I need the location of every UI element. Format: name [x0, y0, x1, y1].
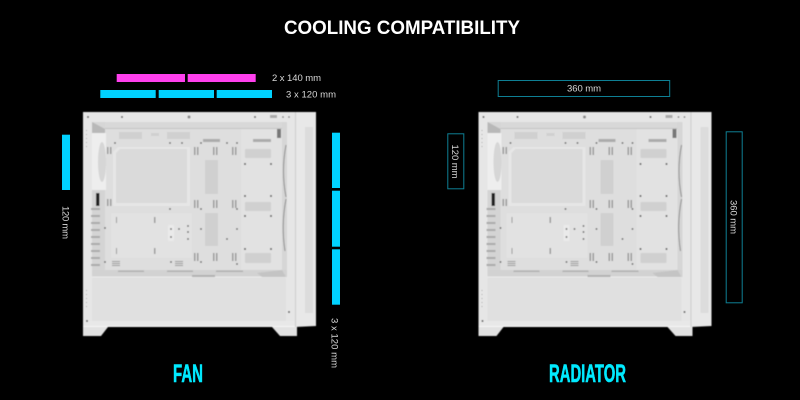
label: top 360 mm: 360 mm [567, 84, 601, 94]
top radiator outline [498, 80, 670, 96]
rear fan bar [62, 135, 70, 190]
PC case: fan side [83, 112, 316, 336]
rear radiator outline [448, 134, 464, 189]
label: front 3 x 120 mm: 3 x 120 mm [328, 318, 340, 368]
title: COOLING COMPATIBILITY [284, 18, 520, 39]
top fan bars: 2 x 140 mm [117, 74, 256, 82]
heading: FAN: FAN [173, 360, 203, 388]
label: rear 120 mm: 120 mm [60, 206, 70, 239]
panel: radiator compatibility [448, 80, 742, 388]
label: 3 x 120 mm: 3 x 120 mm [286, 90, 336, 100]
heading: RADIATOR: RADIATOR [549, 360, 626, 388]
label: rear 120 mm: 120 mm [449, 144, 460, 179]
PC case: radiator side [478, 112, 712, 336]
front fan bars [332, 133, 340, 305]
label: 2 x 140 mm: 2 x 140 mm [272, 73, 321, 84]
top fan bars: 3 x 120 mm [100, 90, 272, 98]
label: front 360 mm: 360 mm [728, 200, 738, 234]
front radiator outline [726, 132, 742, 303]
panel: fan compatibility [60, 73, 340, 388]
